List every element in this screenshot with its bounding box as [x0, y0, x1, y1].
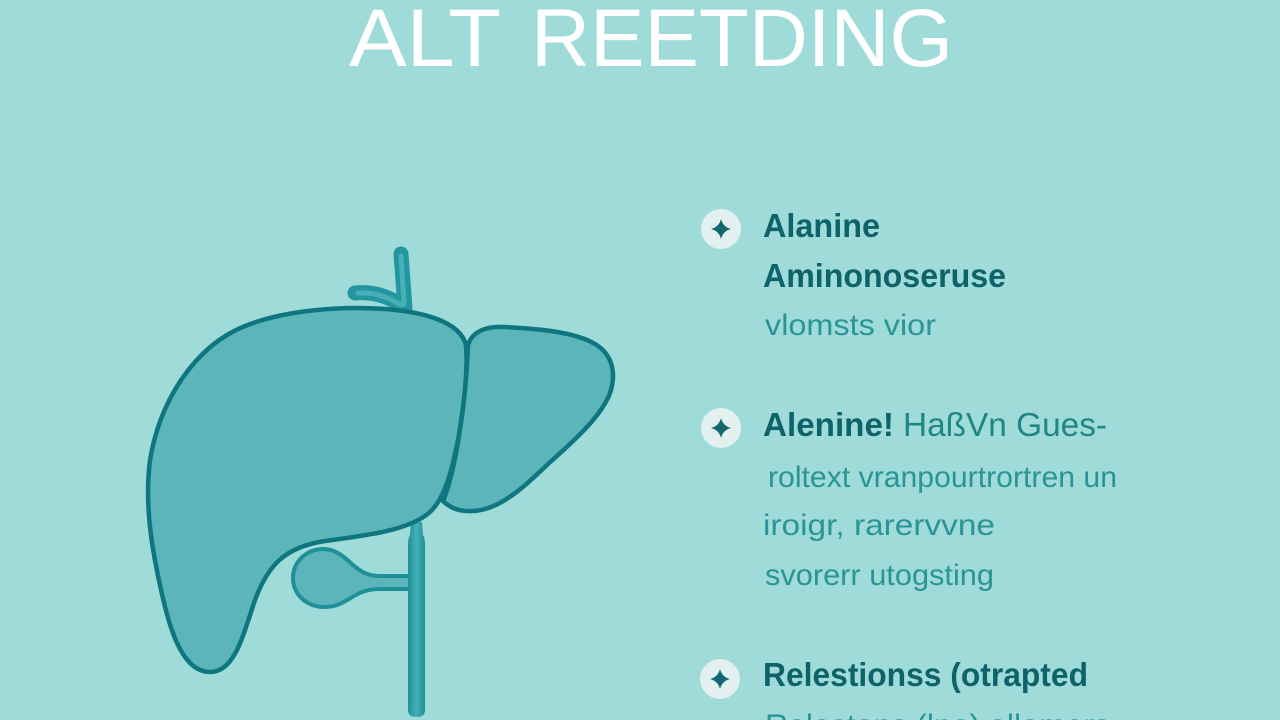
- icon: star badge: [701, 209, 741, 249]
- bile duct: [408, 522, 425, 717]
- heading: [763, 207, 1006, 294]
- title: [349, 0, 953, 84]
- heading: Alanine: [763, 207, 880, 244]
- icon: star badge: [700, 659, 740, 699]
- vessel above liver: [355, 254, 405, 308]
- item: Alenine: [701, 406, 1117, 592]
- heading: Alenine!: [763, 406, 894, 443]
- item: Alanine Aminonoseruse: [701, 207, 1006, 342]
- heading: Aminonoseruse: [763, 257, 1006, 294]
- description: roltext vranpourtrortren un: [768, 461, 1117, 494]
- liver illustration: [148, 254, 613, 717]
- item: Relestionss: [700, 656, 1110, 720]
- icon: star badge: [701, 408, 741, 448]
- description: iroigr, rarervvne: [763, 509, 995, 542]
- gallbladder: [293, 549, 410, 607]
- description: [763, 461, 1117, 592]
- description: svorerr utogsting: [765, 559, 994, 592]
- left liver lobe: [148, 308, 467, 672]
- heading: Relestionss (otrapted: [763, 656, 1088, 693]
- right liver lobe: [443, 327, 613, 511]
- description: vlomsts vior: [765, 309, 936, 342]
- heading: HaßVn Gues-: [903, 406, 1107, 443]
- heading: [763, 406, 1107, 443]
